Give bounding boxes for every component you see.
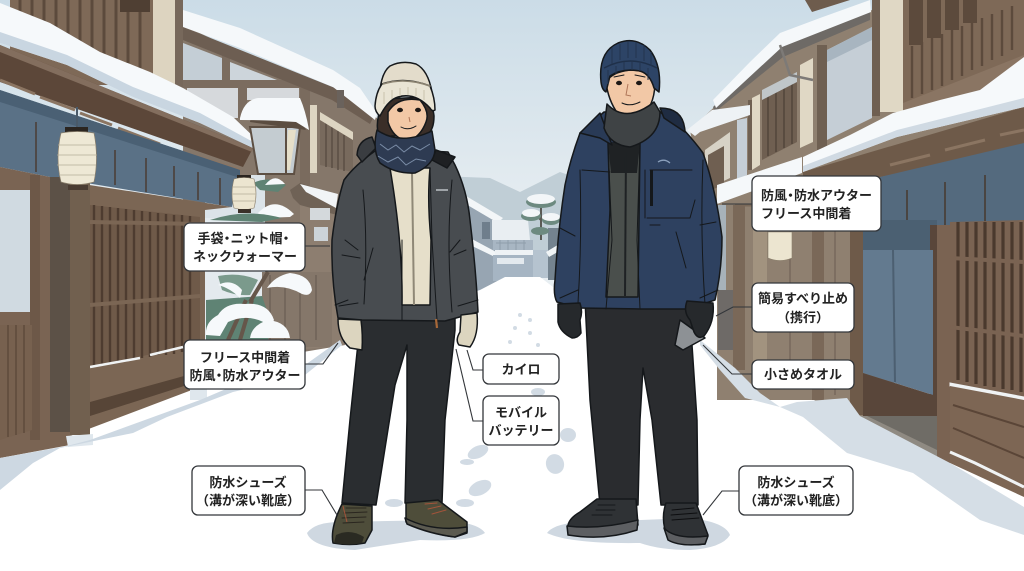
man pants [585, 300, 698, 505]
lantern: left small [232, 175, 256, 213]
left second building [183, 10, 377, 380]
man right shoe [663, 503, 708, 545]
man hat [601, 41, 660, 92]
woman left shoe [332, 504, 372, 544]
ground snow shadow left [0, 340, 342, 490]
woman gloves [338, 313, 477, 350]
label: outerwear and fleece, man: フリース中間着 [761, 206, 851, 221]
roof snow [713, 8, 870, 112]
background: sky [0, 0, 1024, 300]
lamp: hanging house lamp [240, 98, 309, 174]
man scarf [604, 102, 660, 147]
left pine tree [205, 175, 332, 347]
label: fleece and outerwear, woman [184, 340, 338, 389]
label: mobile battery: モバイル [495, 405, 547, 420]
label: mobile battery [456, 349, 559, 445]
label: gloves hat neck warmer [184, 223, 330, 271]
lantern: left large [57, 107, 97, 190]
man gloves [558, 301, 713, 338]
label: mobile battery: バッテリー [488, 423, 554, 438]
label: waterproof shoes, woman: 防水シューズ [209, 475, 287, 490]
ground snow shadow right [700, 340, 1024, 535]
woman head [377, 97, 434, 141]
figure: woman [332, 62, 478, 545]
man towel [675, 320, 705, 350]
label: outerwear and fleece, man: 防風・防水アウター [761, 188, 872, 203]
left foreground building [0, 0, 257, 458]
background: distant street buildings [464, 196, 568, 292]
label: simple crampons: 簡易すべり止め [758, 291, 848, 306]
background: distant mountains [440, 172, 600, 260]
label: simple crampons [716, 283, 854, 332]
label: fleece and outerwear, woman: 防風・防水アウター [189, 368, 301, 383]
woman fleece [390, 168, 431, 305]
main snow on eave [803, 57, 1024, 172]
snow on eave [0, 3, 257, 148]
lower wall [0, 167, 70, 458]
label: heat pack: カイロ [501, 362, 541, 377]
man left shoe [567, 499, 638, 537]
label: heat pack [467, 350, 559, 384]
label: small towel [703, 345, 854, 389]
label: outerwear and fleece, man [722, 176, 881, 231]
label: fleece and outerwear, woman: フリース中間着 [200, 350, 290, 365]
woman jacket [332, 150, 478, 321]
man jacket [554, 112, 722, 309]
label: small towel: 小さめタオル [764, 367, 842, 382]
ground shadows [307, 518, 730, 550]
right foreground building [803, 57, 1024, 497]
figure: man [554, 41, 722, 545]
woman scarf [375, 130, 435, 173]
man fleece [606, 143, 640, 297]
eave band [0, 45, 253, 167]
label: waterproof shoes, man [703, 466, 853, 515]
background: snowy ground [0, 277, 1024, 571]
label: waterproof shoes, woman [192, 466, 337, 515]
footprints [385, 313, 576, 507]
woman pants [342, 305, 455, 505]
lower eave snow [717, 157, 802, 204]
right upper building [687, 0, 1024, 420]
label: waterproof shoes, man: 防水シューズ [757, 475, 835, 490]
noren [0, 90, 240, 207]
label: waterproof shoes, woman: （溝が深い靴底） [196, 493, 300, 508]
man head [606, 70, 655, 118]
woman hat [375, 62, 435, 116]
label: waterproof shoes, man: （溝が深い靴底） [744, 493, 848, 508]
label: simple crampons: （携行） [777, 310, 829, 325]
background: small pine [521, 194, 560, 240]
label: gloves hat neck warmer: ネックウォーマー [193, 249, 297, 264]
label: gloves hat neck warmer: 手袋・ニット帽・ [197, 231, 293, 246]
woman right shoe [405, 500, 467, 537]
